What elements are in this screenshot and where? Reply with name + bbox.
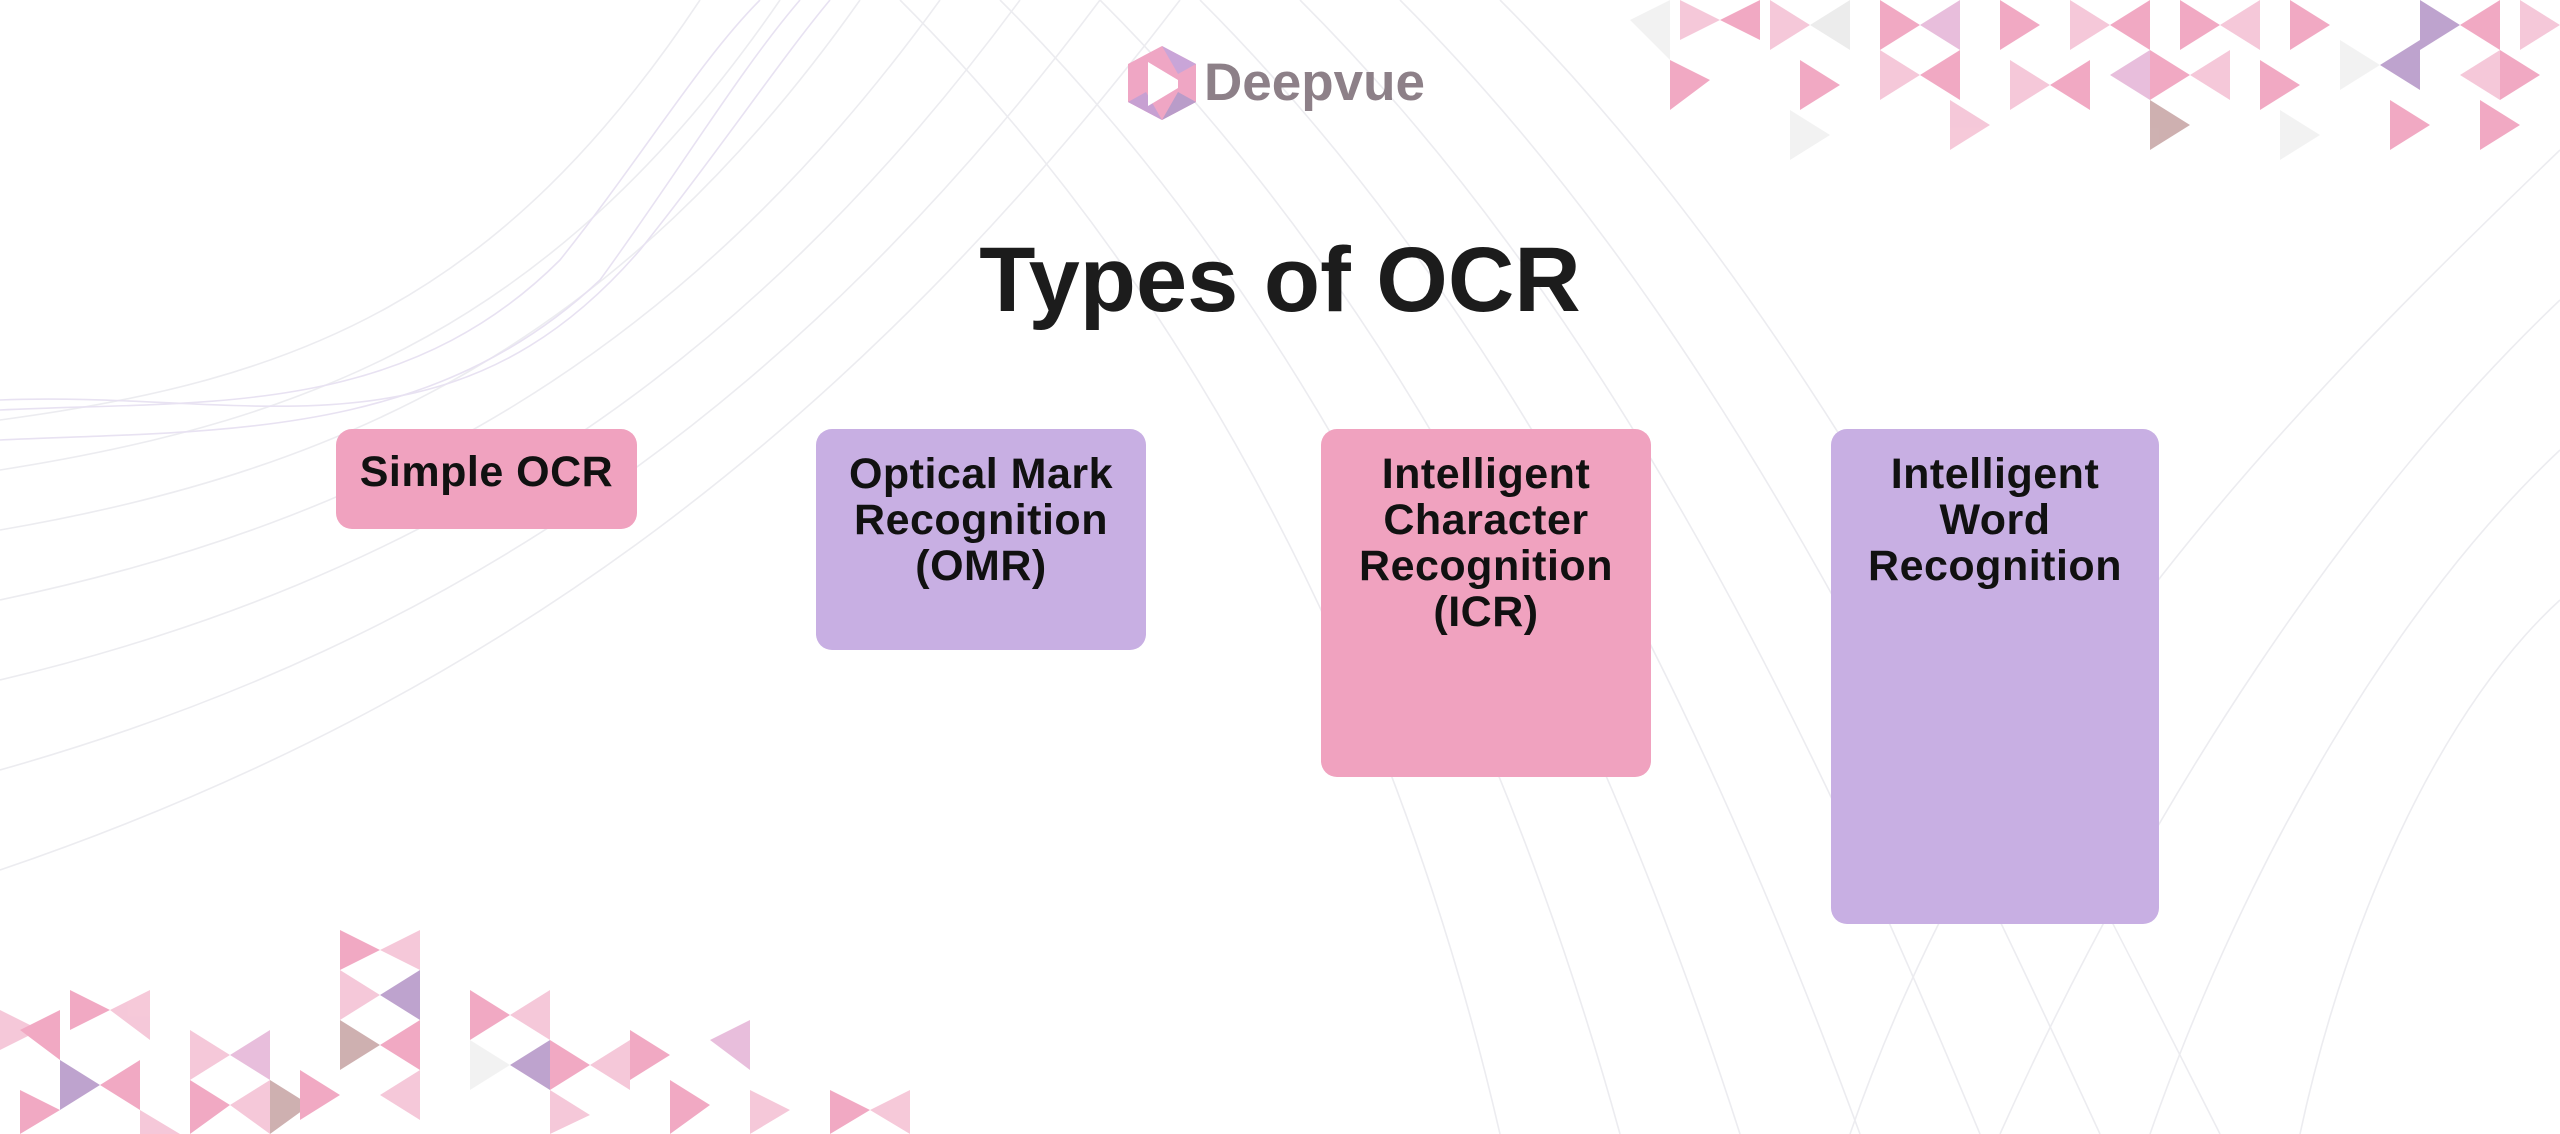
box: Intelligent Word Recognition: [1831, 429, 2159, 924]
box: Intelligent Character Recognition: (ICR): [1433, 588, 1539, 636]
box: Intelligent Word Recognition: Word: [1939, 496, 2051, 544]
box: Optical Mark Recognition: (OMR): [915, 542, 1047, 590]
decoration: bottom-left triangles: [0, 930, 910, 1134]
box: Optical Mark Recognition: Optical Mark: [849, 450, 1113, 498]
title: Types of OCR: [979, 229, 1581, 331]
icon: hexagon logo: [1128, 46, 1196, 120]
box: Intelligent Character Recognition: Recognition: [1359, 542, 1613, 590]
box: Intelligent Word Recognition: Recognition: [1868, 542, 2122, 590]
box: Intelligent Character Recognition: [1321, 429, 1651, 777]
box: Simple OCR: Simple OCR: [360, 448, 613, 496]
logo: [1128, 46, 1425, 120]
box: Simple OCR: [336, 429, 637, 529]
box: Optical Mark Recognition: Recognition: [854, 496, 1108, 544]
box: Optical Mark Recognition: [816, 429, 1146, 650]
box: Intelligent Word Recognition: Intelligent: [1891, 450, 2099, 498]
decoration: top-right triangles: [1630, 0, 2560, 160]
brand name: Deepvue: [1204, 53, 1425, 112]
box: Intelligent Character Recognition: Character: [1383, 496, 1589, 544]
box: Intelligent Character Recognition: Intelligent: [1382, 450, 1590, 498]
